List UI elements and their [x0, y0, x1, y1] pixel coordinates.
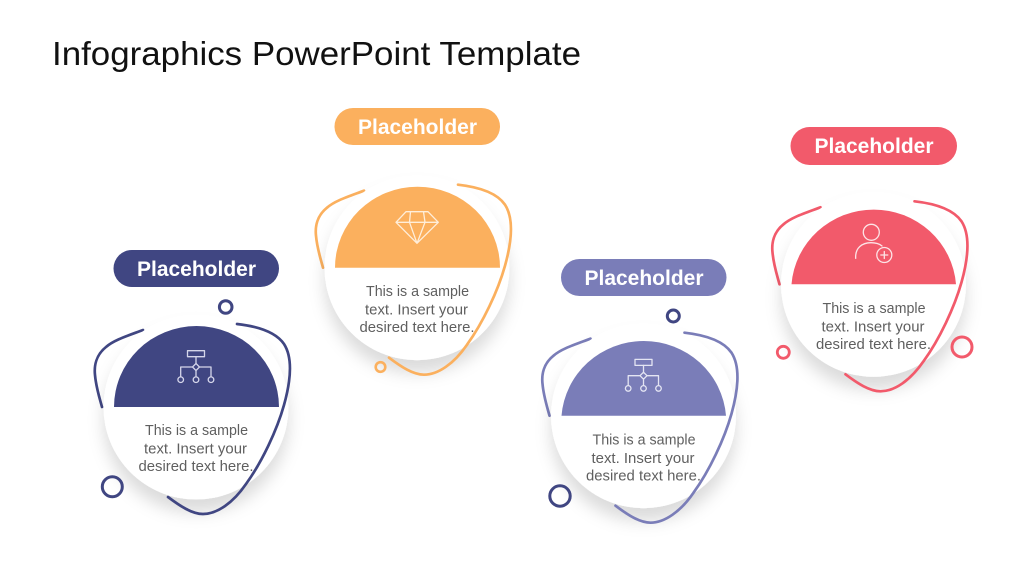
outline left: navy [95, 330, 143, 407]
outline right: periwinkle [616, 333, 738, 523]
title: Infographics PowerPoint Template [52, 35, 581, 72]
icon: hierarchy [178, 351, 214, 383]
ring small: coral [777, 346, 789, 358]
half disc: orange [335, 187, 500, 268]
label pill: navy [114, 250, 279, 287]
panel: coral card [772, 127, 972, 391]
body text: coral: This is a sample [822, 301, 926, 317]
label pill: orange [334, 108, 500, 145]
panel: navy card [95, 250, 290, 514]
outline left: coral [772, 207, 820, 284]
icon: diamond [396, 212, 438, 243]
ring small: periwinkle [667, 310, 679, 322]
ring large: coral [952, 337, 972, 357]
label pill: orange: Placeholder [358, 116, 477, 139]
body text: orange [360, 284, 474, 336]
label pill: coral: Placeholder [814, 135, 934, 158]
half disc: navy [114, 326, 279, 407]
outline right: navy [168, 324, 290, 514]
body text: coral: desired text here. [816, 337, 931, 353]
white circle: periwinkle [551, 323, 736, 508]
white circle: navy [104, 314, 288, 500]
body text: periwinkle: text. Insert your [592, 451, 695, 467]
body text: navy: This is a sample [145, 423, 248, 439]
body text: orange: This is a sample [366, 284, 469, 300]
body text: navy: desired text here. [138, 459, 254, 475]
label pill: coral [790, 127, 957, 165]
white circle: orange [324, 175, 510, 360]
ring large: navy [102, 477, 122, 497]
ring small: orange [376, 362, 385, 372]
label pill: periwinkle: Placeholder [584, 267, 704, 290]
outline right: coral [846, 201, 968, 391]
body text: navy [138, 423, 254, 475]
icon: hierarchy [625, 359, 661, 391]
ring large: periwinkle [550, 486, 570, 506]
label pill: navy: Placeholder [137, 258, 256, 281]
outline right: orange [389, 185, 511, 375]
panel: orange card [316, 108, 511, 375]
icon: add user [856, 224, 892, 262]
body text: coral [816, 301, 931, 353]
outline left: periwinkle [542, 339, 590, 416]
white circle: coral [781, 192, 966, 377]
body text: periwinkle [586, 432, 701, 484]
body text: orange: text. Insert your [365, 302, 468, 318]
half disc: coral [792, 210, 956, 284]
body text: navy: text. Insert your [144, 442, 247, 458]
ring small: navy [219, 301, 232, 313]
body text: coral: text. Insert your [822, 320, 925, 336]
half disc: periwinkle [562, 341, 726, 416]
outline left: orange [316, 191, 364, 268]
body text: periwinkle: This is a sample [592, 432, 696, 448]
body text: orange: desired text here. [360, 320, 474, 336]
panel: periwinkle card [542, 259, 738, 523]
body text: periwinkle: desired text here. [586, 468, 701, 484]
label pill: periwinkle [561, 259, 726, 296]
